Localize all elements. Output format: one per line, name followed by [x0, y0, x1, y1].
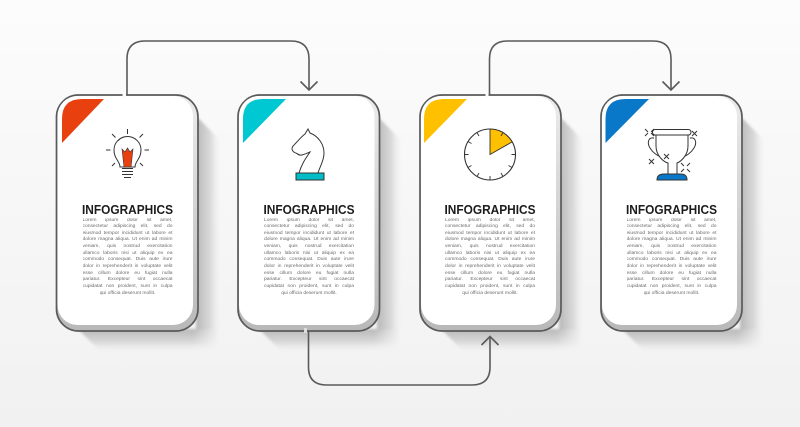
text block: dolor in reprehenderit in voluptate velit: [626, 264, 716, 269]
panel: step 2: [238, 95, 403, 353]
text block: dolor in reprehenderit in voluptate velit: [264, 264, 354, 269]
text block: commodo consequat. Duis aute irure: [626, 257, 716, 262]
text block: esse cillum dolore eu fugiat nulla: [626, 271, 716, 276]
text block: Lorem ipsum dolor sit amet,: [445, 218, 535, 222]
text block: eiusmod tempor incididunt ut labore et: [445, 231, 535, 236]
text block: eiusmod tempor incididunt ut labore et: [626, 231, 716, 236]
corner tab: teal: [243, 99, 286, 143]
text block: qui officia deserunt mollit.: [281, 291, 337, 296]
icon: trophy: [645, 129, 697, 180]
text block: ullamco laboris nisi ut aliquip ex ea: [445, 251, 535, 256]
text block: cupidatat non proident, sunt in culpa: [264, 284, 354, 289]
text block: cupidatat non proident, sunt in culpa: [626, 284, 716, 289]
panel: step 3: [420, 92, 585, 353]
text block: pariatur. Excepteur sint occaecat: [626, 277, 716, 282]
arrow: step 3 to step 4: [490, 41, 680, 95]
text block: veniam, quis nostrud exercitation: [264, 244, 354, 249]
text block: consectetur adipiscing elit, sed do: [445, 224, 535, 229]
text block: commodo consequat. Duis aute irure: [82, 257, 172, 262]
corner tab: blue: [606, 99, 649, 143]
text block: [626, 218, 718, 300]
text block: esse cillum dolore eu fugiat nulla: [445, 271, 535, 276]
text block: veniam, quis nostrud exercitation: [82, 244, 172, 249]
text block: commodo consequat. Duis aute irure: [264, 257, 354, 262]
text block: veniam, quis nostrud exercitation: [445, 244, 535, 249]
arrow: step 1 to step 2: [127, 41, 318, 95]
arrow: step 2 to step 3: [308, 331, 498, 385]
text block: qui officia deserunt mollit.: [462, 291, 518, 296]
text block: dolor in reprehenderit in voluptate velit: [445, 264, 535, 269]
text block: esse cillum dolore eu fugiat nulla: [264, 271, 354, 276]
text block: veniam, quis nostrud exercitation: [626, 244, 716, 249]
icon: clock: [464, 129, 516, 180]
text block: cupidatat non proident, sunt in culpa: [82, 284, 172, 289]
text block: eiusmod tempor incididunt ut labore et: [82, 231, 172, 236]
text block: pariatur. Excepteur sint occaecat: [82, 277, 172, 282]
text block: pariatur. Excepteur sint occaecat: [445, 277, 535, 282]
panel: step 1: [56, 92, 222, 353]
text block: dolore magna aliqua. Ut enim ad minim: [82, 237, 172, 242]
text block: pariatur. Excepteur sint occaecat: [264, 277, 354, 282]
text block: ullamco laboris nisi ut aliquip ex ea: [264, 251, 354, 256]
heading: INFOGRAPHICS: [82, 202, 173, 217]
text block: Lorem ipsum dolor sit amet,: [82, 218, 172, 222]
heading: INFOGRAPHICS: [626, 202, 717, 217]
text block: dolore magna aliqua. Ut enim ad minim: [264, 237, 354, 242]
text block: consectetur adipiscing elit, sed do: [82, 224, 172, 229]
text block: [445, 218, 536, 300]
text block: [264, 218, 355, 300]
text block: Lorem ipsum dolor sit amet,: [264, 218, 354, 222]
icon: chess knight: [292, 129, 324, 180]
corner tab: red: [62, 99, 104, 143]
text block: commodo consequat. Duis aute irure: [445, 257, 535, 262]
text block: cupidatat non proident, sunt in culpa: [445, 284, 535, 289]
heading: INFOGRAPHICS: [444, 202, 536, 217]
text block: dolore magna aliqua. Ut enim ad minim: [626, 237, 716, 242]
corner tab: yellow: [424, 99, 467, 143]
text block: dolor in reprehenderit in voluptate velit: [82, 264, 172, 269]
text block: qui officia deserunt mollit.: [100, 291, 155, 296]
text block: consectetur adipiscing elit, sed do: [264, 224, 354, 229]
text block: ullamco laboris nisi ut aliquip ex ea: [82, 251, 172, 256]
text block: Lorem ipsum dolor sit amet,: [626, 218, 716, 222]
text block: eiusmod tempor incididunt ut labore et: [264, 231, 354, 236]
text block: [82, 218, 174, 300]
text block: esse cillum dolore eu fugiat nulla: [82, 271, 172, 276]
text block: consectetur adipiscing elit, sed do: [626, 224, 716, 229]
text block: qui officia deserunt mollit.: [644, 291, 699, 296]
text block: ullamco laboris nisi ut aliquip ex ea: [626, 251, 716, 256]
icon: light bulb: [106, 129, 149, 178]
text block: dolore magna aliqua. Ut enim ad minim: [445, 237, 535, 242]
heading: INFOGRAPHICS: [264, 202, 355, 217]
panel: step 4: [601, 95, 766, 353]
